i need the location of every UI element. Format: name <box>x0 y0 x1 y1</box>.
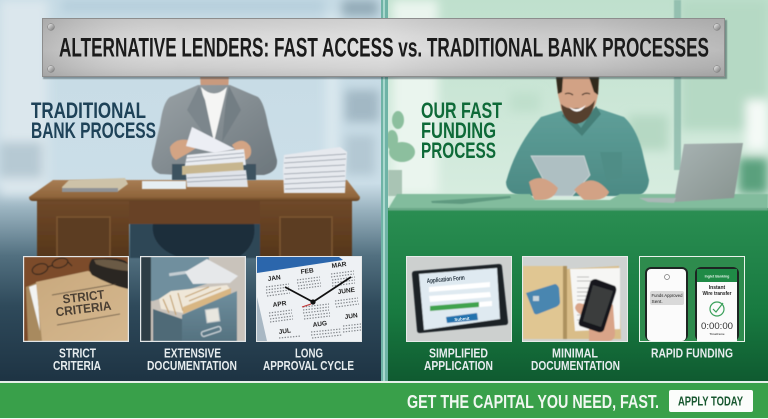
card: long approval cycle: JUL <box>278 327 291 336</box>
heading: our fast funding process: PROCESS <box>421 138 496 163</box>
card labels: fast funding: APPLICATION <box>424 358 493 373</box>
card: minimal documentation <box>522 256 628 342</box>
card: long approval cycle: MAR <box>331 261 347 270</box>
panel: our fast funding process <box>384 0 768 382</box>
card: rapid funding <box>639 256 745 342</box>
person with tablet <box>506 74 649 200</box>
heading: our fast funding process: FUNDING <box>421 118 496 143</box>
desk and laptop <box>388 143 768 210</box>
card labels: traditional: DOCUMENTATION <box>147 358 237 373</box>
heading: our fast funding process <box>421 98 502 163</box>
heading: traditional bank process <box>31 98 156 143</box>
card labels: fast funding <box>424 346 733 373</box>
plant <box>386 111 415 196</box>
card: rapid funding: Funds Approved <box>652 293 683 299</box>
green lower panel <box>388 208 768 382</box>
card: long approval cycle: AUG <box>312 320 328 329</box>
card labels: fast funding: MINIMAL <box>552 346 598 360</box>
card: strict criteria: STRICT <box>62 287 106 307</box>
card labels: fast funding: RAPID FUNDING <box>651 346 733 360</box>
paper stacks <box>62 147 347 193</box>
heading: traditional bank process: TRADITIONAL <box>31 98 146 123</box>
card: rapid funding: 0:00:00 <box>701 321 733 331</box>
panel: traditional bank process <box>0 0 384 382</box>
card: rapid funding: Instant <box>709 285 726 291</box>
card: long approval cycle <box>256 249 362 342</box>
apply today button <box>669 390 753 412</box>
card labels: traditional: STRICT <box>59 346 96 360</box>
card: strict criteria <box>23 256 129 342</box>
card: rapid funding: Timeframe <box>709 332 725 336</box>
card: long approval cycle: JAN <box>267 274 281 283</box>
card labels: fast funding: SIMPLIFIED <box>429 346 488 360</box>
card: long approval cycle: APR <box>272 300 287 309</box>
card: long approval cycle: JUN <box>344 312 358 321</box>
card: simplified application: Application Form <box>427 275 465 285</box>
person at desk <box>152 74 277 180</box>
call to action bar <box>0 381 768 419</box>
heading: traditional bank process: BANK PROCESS <box>31 118 156 143</box>
desk <box>29 180 360 258</box>
card: rapid funding: Inglet Banking <box>705 274 729 278</box>
card labels: traditional: APPROVAL CYCLE <box>263 358 354 373</box>
card: long approval cycle: FEB <box>300 267 314 276</box>
card: extensive documentation <box>140 256 246 342</box>
card: simplified application: Submit <box>454 316 470 322</box>
card labels: traditional: EXTENSIVE <box>164 346 221 360</box>
apply today button: APPLY TODAY <box>678 394 743 408</box>
card: rapid funding: Sent. <box>652 299 663 305</box>
card labels: traditional <box>53 346 354 373</box>
card: strict criteria: CRITERIA <box>55 299 112 319</box>
card: rapid funding: Wire transfer <box>702 291 732 297</box>
card: simplified application <box>406 256 512 342</box>
card labels: traditional: LONG <box>295 346 323 360</box>
card: long approval cycle: JUNE <box>337 287 356 296</box>
card labels: traditional: CRITERIA <box>53 358 101 373</box>
card labels: fast funding: DOCUMENTATION <box>531 358 620 373</box>
title plate <box>42 18 727 79</box>
glass divider <box>381 0 388 382</box>
screws <box>48 24 720 72</box>
cta headline: GET THE CAPITAL YOU NEED, FAST. <box>407 391 659 412</box>
heading: our fast funding process: OUR FAST <box>421 98 502 123</box>
